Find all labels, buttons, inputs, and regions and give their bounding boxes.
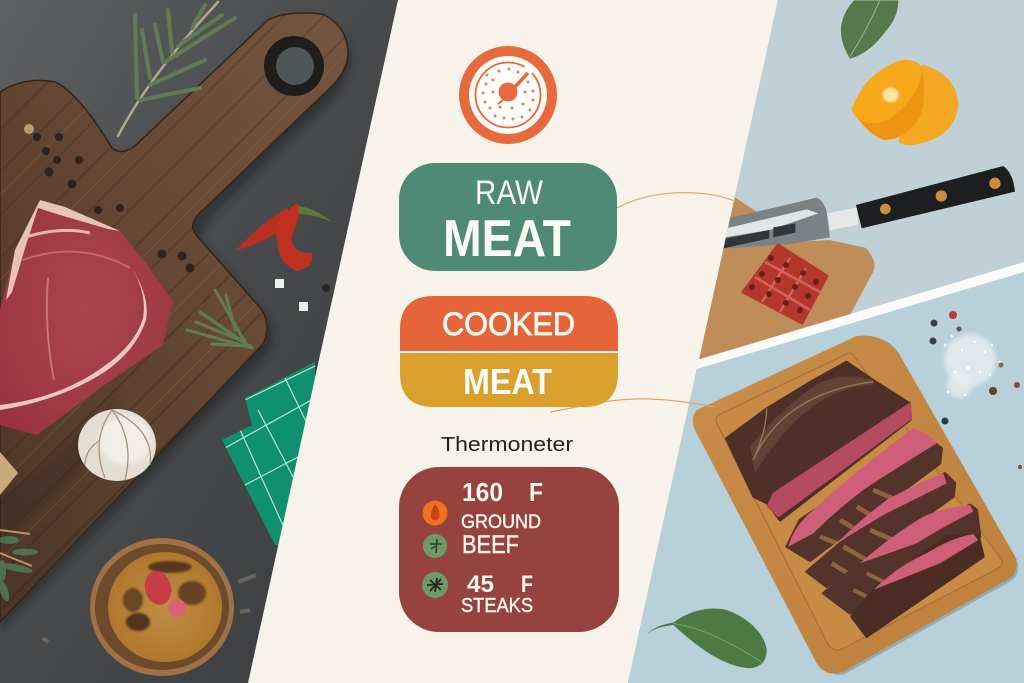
45 F: 45	[467, 571, 494, 598]
thermometer heading: Thermoneter	[441, 434, 573, 456]
sauce bowl	[90, 538, 234, 676]
45 F	[467, 571, 533, 598]
white divider stripe	[697, 262, 1024, 369]
panel: raw meat photo on slate	[0, 0, 357, 683]
board handle hole	[264, 36, 324, 96]
green leaf bottom	[647, 608, 767, 668]
slice 1	[787, 428, 942, 561]
green checked napkin	[222, 362, 315, 545]
roast piece	[726, 362, 912, 521]
bread piece	[0, 452, 18, 495]
raw meat badge	[399, 163, 617, 271]
red berry garnish	[144, 571, 186, 617]
steaks label: STEAKS	[461, 595, 533, 617]
salt cubes	[275, 279, 308, 311]
icon: gauge thermometer dial	[459, 46, 557, 144]
slice 4	[852, 534, 983, 637]
connector line cooked	[550, 399, 716, 412]
wooden cutting board	[0, 0, 350, 622]
icon: flame	[422, 500, 448, 526]
cooked meat on wood board	[647, 336, 1018, 675]
red meat cube	[743, 245, 827, 323]
slice 2	[807, 473, 955, 587]
panel: right background	[628, 0, 1024, 683]
peppercorns	[24, 124, 330, 292]
ground label: GROUND	[461, 512, 541, 533]
cooked meat badge	[400, 296, 618, 407]
meat label: MEAT	[443, 210, 571, 268]
cooked label: COOKED	[442, 306, 575, 342]
beef label: BEEF	[462, 531, 519, 559]
rosemary sprig on board	[187, 290, 252, 348]
basil leaf top	[841, 0, 898, 59]
salt and spices	[930, 311, 1022, 469]
panel: center cream column	[248, 0, 778, 683]
raw steak	[0, 200, 173, 435]
icon: herb dark	[422, 572, 448, 598]
knife	[723, 166, 1015, 249]
herbs bottom left	[0, 530, 38, 603]
meat label: MEAT	[463, 361, 552, 402]
raw label: RAW	[475, 174, 543, 212]
slice 3	[823, 505, 980, 613]
orange half	[852, 60, 958, 145]
temperature panel	[399, 467, 619, 632]
red chili peppers	[237, 203, 332, 271]
160 F	[462, 477, 543, 507]
icon: herb	[423, 534, 447, 558]
160 F: F	[529, 477, 543, 507]
connector line raw	[617, 193, 735, 208]
garlic bulb	[78, 409, 156, 481]
wood board	[693, 336, 1017, 674]
160 F: 160	[462, 477, 503, 507]
rosemary sprig top	[118, 2, 235, 136]
small wooden board	[696, 166, 1015, 362]
45 F: F	[521, 571, 533, 598]
